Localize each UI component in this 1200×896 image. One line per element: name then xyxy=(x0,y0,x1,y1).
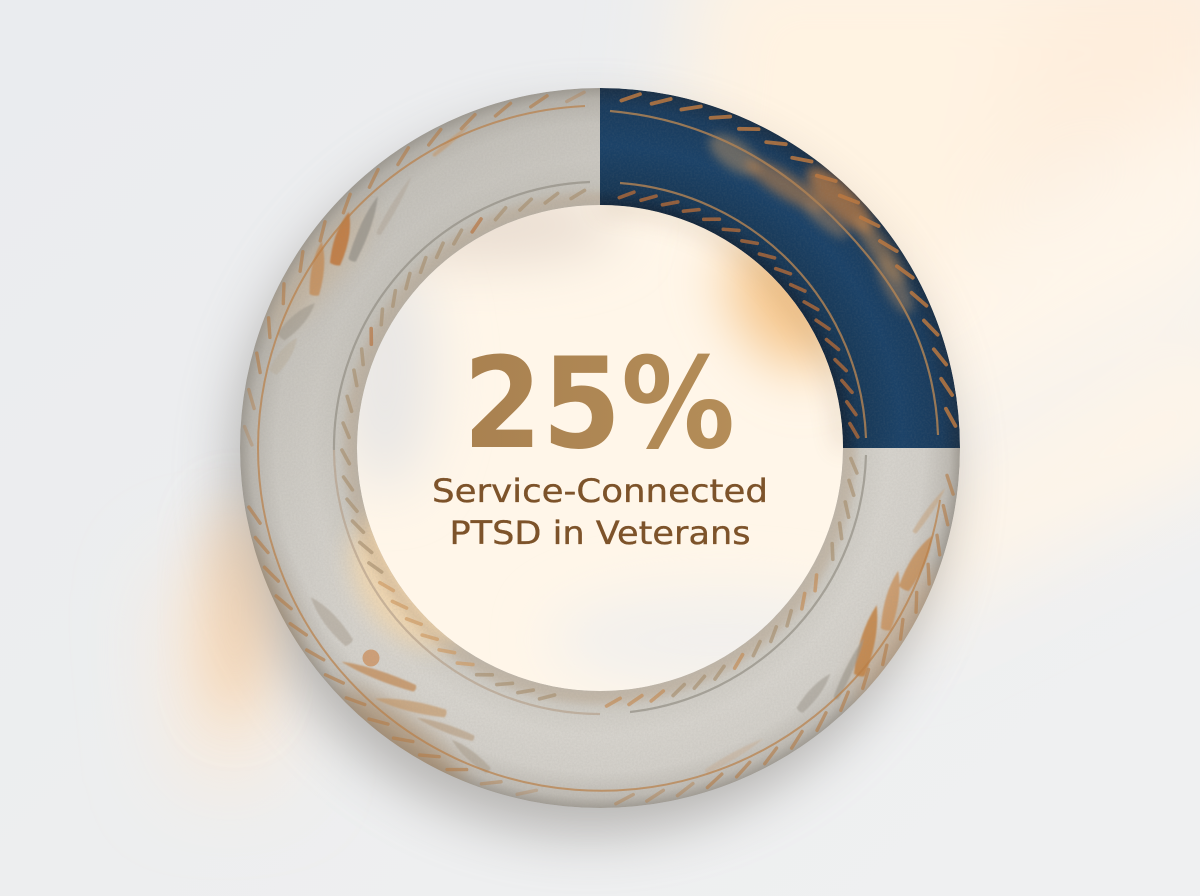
center glow inside ring xyxy=(357,205,843,691)
decorative lines on blue segment xyxy=(610,111,938,438)
feather leaves: lower right xyxy=(704,486,948,775)
outer decorative line on gray arc xyxy=(258,106,940,791)
inner decorative line on gray arc xyxy=(334,182,866,714)
big number: 25% xyxy=(463,330,735,477)
segment: highlighted 25% xyxy=(600,88,960,448)
caption: PTSD in Veterans xyxy=(450,514,750,552)
ring cast shadow xyxy=(205,118,948,834)
feather leaves: lower left xyxy=(306,593,492,775)
dot accent xyxy=(362,650,380,666)
outer tick marks on gray arc xyxy=(244,92,955,804)
segment: remaining 75% xyxy=(240,88,960,808)
center label xyxy=(432,330,768,552)
inner tick marks on gray arc xyxy=(342,190,858,706)
shading and warm tint xyxy=(248,88,938,783)
caption: Service-Connected xyxy=(432,472,768,510)
donut ring xyxy=(201,88,960,808)
feather leaves: upper left xyxy=(268,123,472,376)
outer tick marks on blue segment xyxy=(621,93,955,427)
orange smudges on blue segment xyxy=(702,126,920,318)
paper grain texture xyxy=(366,89,960,632)
caption xyxy=(432,472,768,552)
inner tick marks on blue segment xyxy=(619,191,858,437)
